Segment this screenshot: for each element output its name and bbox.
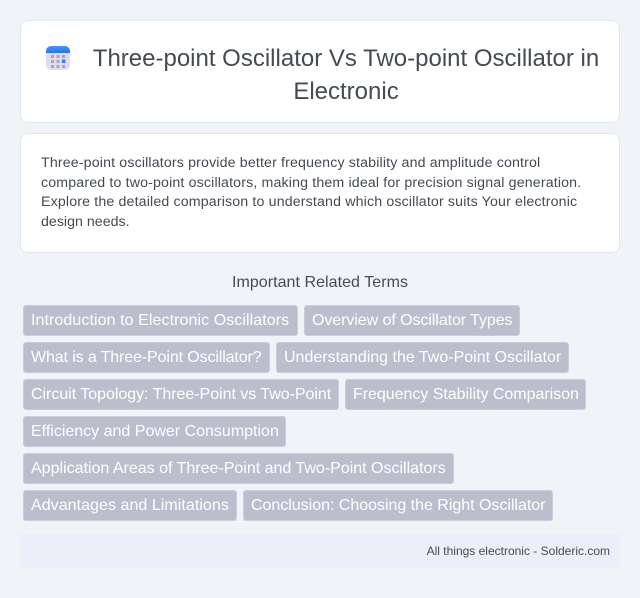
tag: Circuit Topology: Three-Point vs Two-Point [31,386,331,403]
title: Three-point Oscillator Vs Two-point Oscillator in Electronic [93,45,599,105]
tag: What is a Three-Point Oscillator? [31,349,262,366]
heading: important related terms: Important Related Terms [232,274,408,291]
header card [20,20,620,123]
tag [23,453,454,484]
tag: Frequency Stability Comparison [353,386,579,403]
tag: Conclusion: Choosing the Right Oscillator [251,497,545,514]
tag: Advantages and Limitations [31,497,229,514]
tag [304,305,520,336]
tag: Efficiency and Power Consumption [31,423,279,440]
tag [23,342,270,373]
tag: Understanding the Two-Point Oscillator [284,349,561,366]
summary card [20,133,620,253]
tag: Overview of Oscillator Types [312,312,512,329]
summary text: Explore the detailed comparison to understand which oscillator suits Your electronic [41,194,577,210]
tag [23,490,237,521]
summary text: Three-point oscillators provide better frequency stability and amplitude control [41,155,540,171]
icon: calendar [46,46,70,70]
tag [276,342,569,373]
tag: Introduction to Electronic Oscillators [31,312,289,329]
tag [243,490,553,521]
summary text: design needs. [41,214,130,230]
summary text: compared to two-point oscillators, making them ideal for precision signal generation. [41,175,581,191]
summary text [41,155,581,230]
tag [23,416,286,447]
tag [23,379,339,410]
footer text: All things electronic - Solderic.com [427,544,610,558]
tag [23,305,298,336]
tag: Application Areas of Three-Point and Two-Point Oscillators [31,460,446,477]
tag [345,379,586,410]
footer bar [20,534,620,568]
tag list [23,305,586,521]
